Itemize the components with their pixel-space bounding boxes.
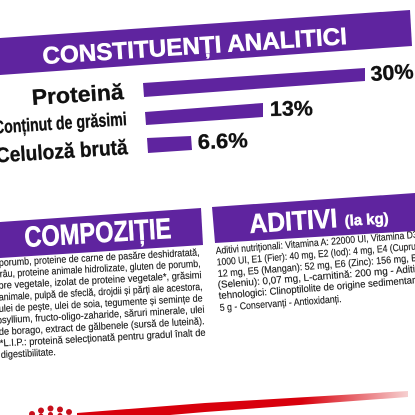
panel: compozitie [0, 208, 206, 361]
panel: analytical constituents [0, 10, 415, 168]
bar: proteina 30% [31, 60, 415, 110]
panel: aditivi [212, 193, 415, 314]
bar: celuloza bruta 6.6%: 6.6% [197, 129, 248, 154]
bar: continut de grasimi 13%: 13% [270, 97, 313, 121]
text block: composition list: fibre vegetale, izolat de proteine vegetale*, grăsimi [0, 270, 202, 292]
text block: composition list: ulei de pește, ulei de soia, tegumente și semințe de [0, 293, 203, 315]
heading banner: aditivi la kg: ADITIVI [248, 203, 338, 239]
footer red stripe [77, 391, 408, 415]
bar: celuloza bruta 6.6% [0, 129, 248, 168]
heading banner: constituenti analitici [0, 10, 412, 75]
text block: composition list: *L.I.P.: proteină selecționată pentru gradul înalt de [0, 328, 206, 349]
heading banner: aditivi la kg [212, 193, 415, 243]
text block: composition list [0, 247, 206, 361]
bar: proteina 30%: 30% [370, 60, 415, 86]
text block: composition list: psyllium, fructo-oligo-zaharide, săruri minerale, ulei [0, 305, 205, 326]
bar: continut de grasimi 13% [0, 97, 313, 138]
text block: composition list: animale, pulpă de sfeclă, drojdii și părți ale acestora, [0, 282, 203, 303]
text block: composition list: digestibilitate. [1, 347, 56, 361]
icon: royal canin crown logo dots [29, 406, 72, 415]
heading banner: compozitie: COMPOZIȚIE [23, 213, 172, 254]
text block: additives list: 5 g - Conservanți - Antioxidanți. [219, 294, 342, 314]
heading banner: aditivi la kg: (la kg) [344, 210, 389, 230]
text block: composition list: grâu, proteine animale hidrolizate, gluten de porumb, [0, 259, 201, 280]
text block: composition list: de borago, extract de gălbenele (sursă de luteină). [0, 316, 205, 338]
text block: additives list [215, 230, 415, 314]
text block: composition list: porumb, proteine de carne de pasăre deshidratată, [0, 247, 200, 269]
bar: proteina 30%: Proteină [31, 79, 125, 110]
heading banner: constituenti analitici: CONSTITUENȚI ANALITICI [42, 23, 348, 70]
